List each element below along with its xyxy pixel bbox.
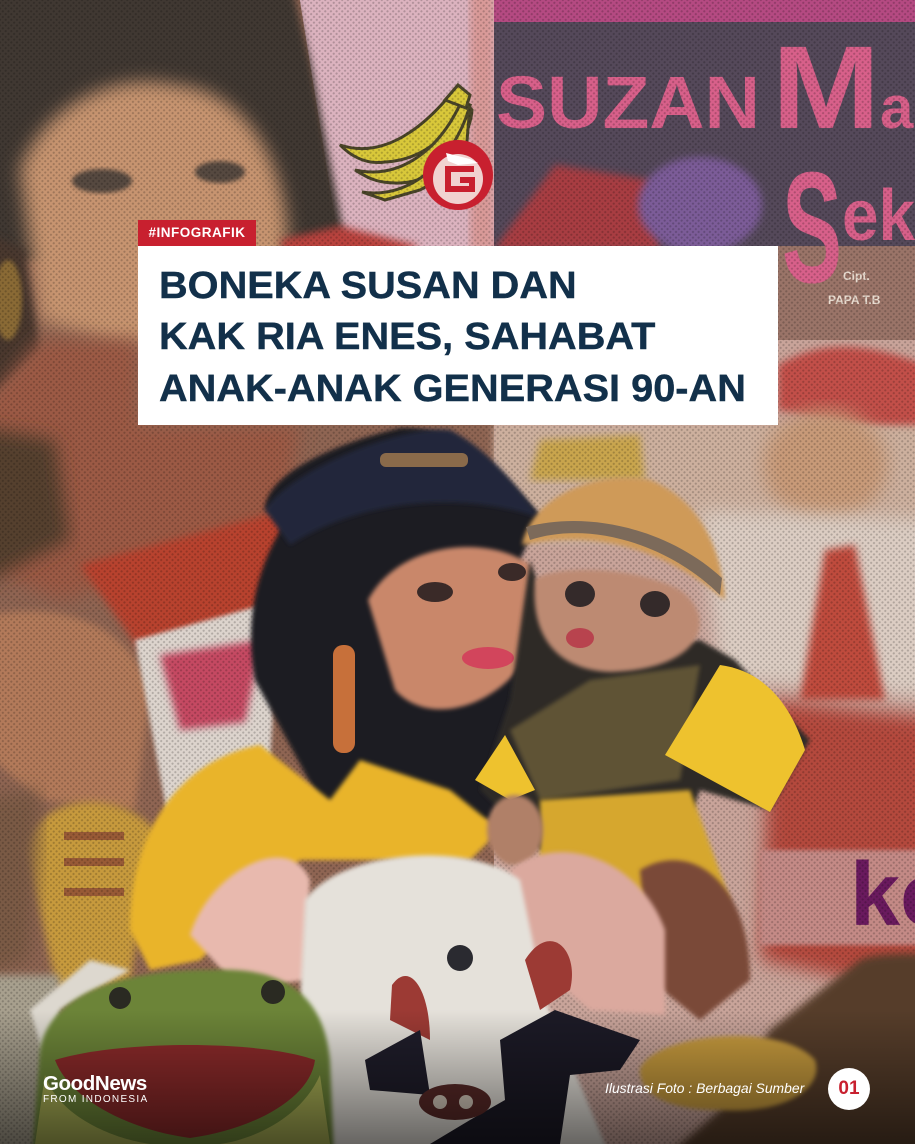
title panel: KAK RIA ENES, SAHABAT bbox=[159, 316, 655, 358]
title panel: BONEKA SUSAN DAN bbox=[159, 265, 577, 307]
page number: 01 bbox=[838, 1078, 860, 1099]
GoodNews logo bbox=[43, 1072, 148, 1105]
left backdrop: presenter magazine photo bbox=[0, 0, 494, 1144]
photo credit: Ilustrasi Foto : Berbagai Sumber bbox=[605, 1080, 804, 1096]
page number bbox=[828, 1068, 870, 1110]
right backdrop: Suzan cassette cover bbox=[494, 0, 915, 1144]
GoodNews logo: FROM INDONESIA bbox=[43, 1094, 148, 1105]
title text on cover: PAPA T.B bbox=[828, 293, 881, 307]
toy: cow bbox=[190, 852, 665, 1144]
category tag: #INFOGRAFIK bbox=[148, 225, 246, 240]
icon: bananas bbox=[340, 85, 472, 200]
title text on cover: Cipt. bbox=[843, 269, 870, 283]
GoodNews logo: GoodNews bbox=[43, 1072, 147, 1095]
bottom shade bbox=[0, 1010, 915, 1144]
logo badge bbox=[423, 140, 493, 210]
title text on cover: a bbox=[880, 74, 914, 141]
toy: frog bbox=[30, 960, 335, 1144]
title text on cover: S bbox=[782, 140, 842, 316]
cutout: Kak Ria Enes bbox=[130, 428, 560, 970]
category tag bbox=[138, 220, 256, 246]
toy: bear and pastry bbox=[640, 954, 915, 1144]
title text on cover: SUZAN bbox=[496, 61, 760, 144]
title panel: ANAK-ANAK GENERASI 90-AN bbox=[159, 368, 746, 410]
title text on cover bbox=[496, 22, 915, 945]
cutout: Susan doll bbox=[475, 478, 810, 1020]
title text on cover: M bbox=[772, 22, 880, 154]
title panel bbox=[138, 246, 778, 425]
